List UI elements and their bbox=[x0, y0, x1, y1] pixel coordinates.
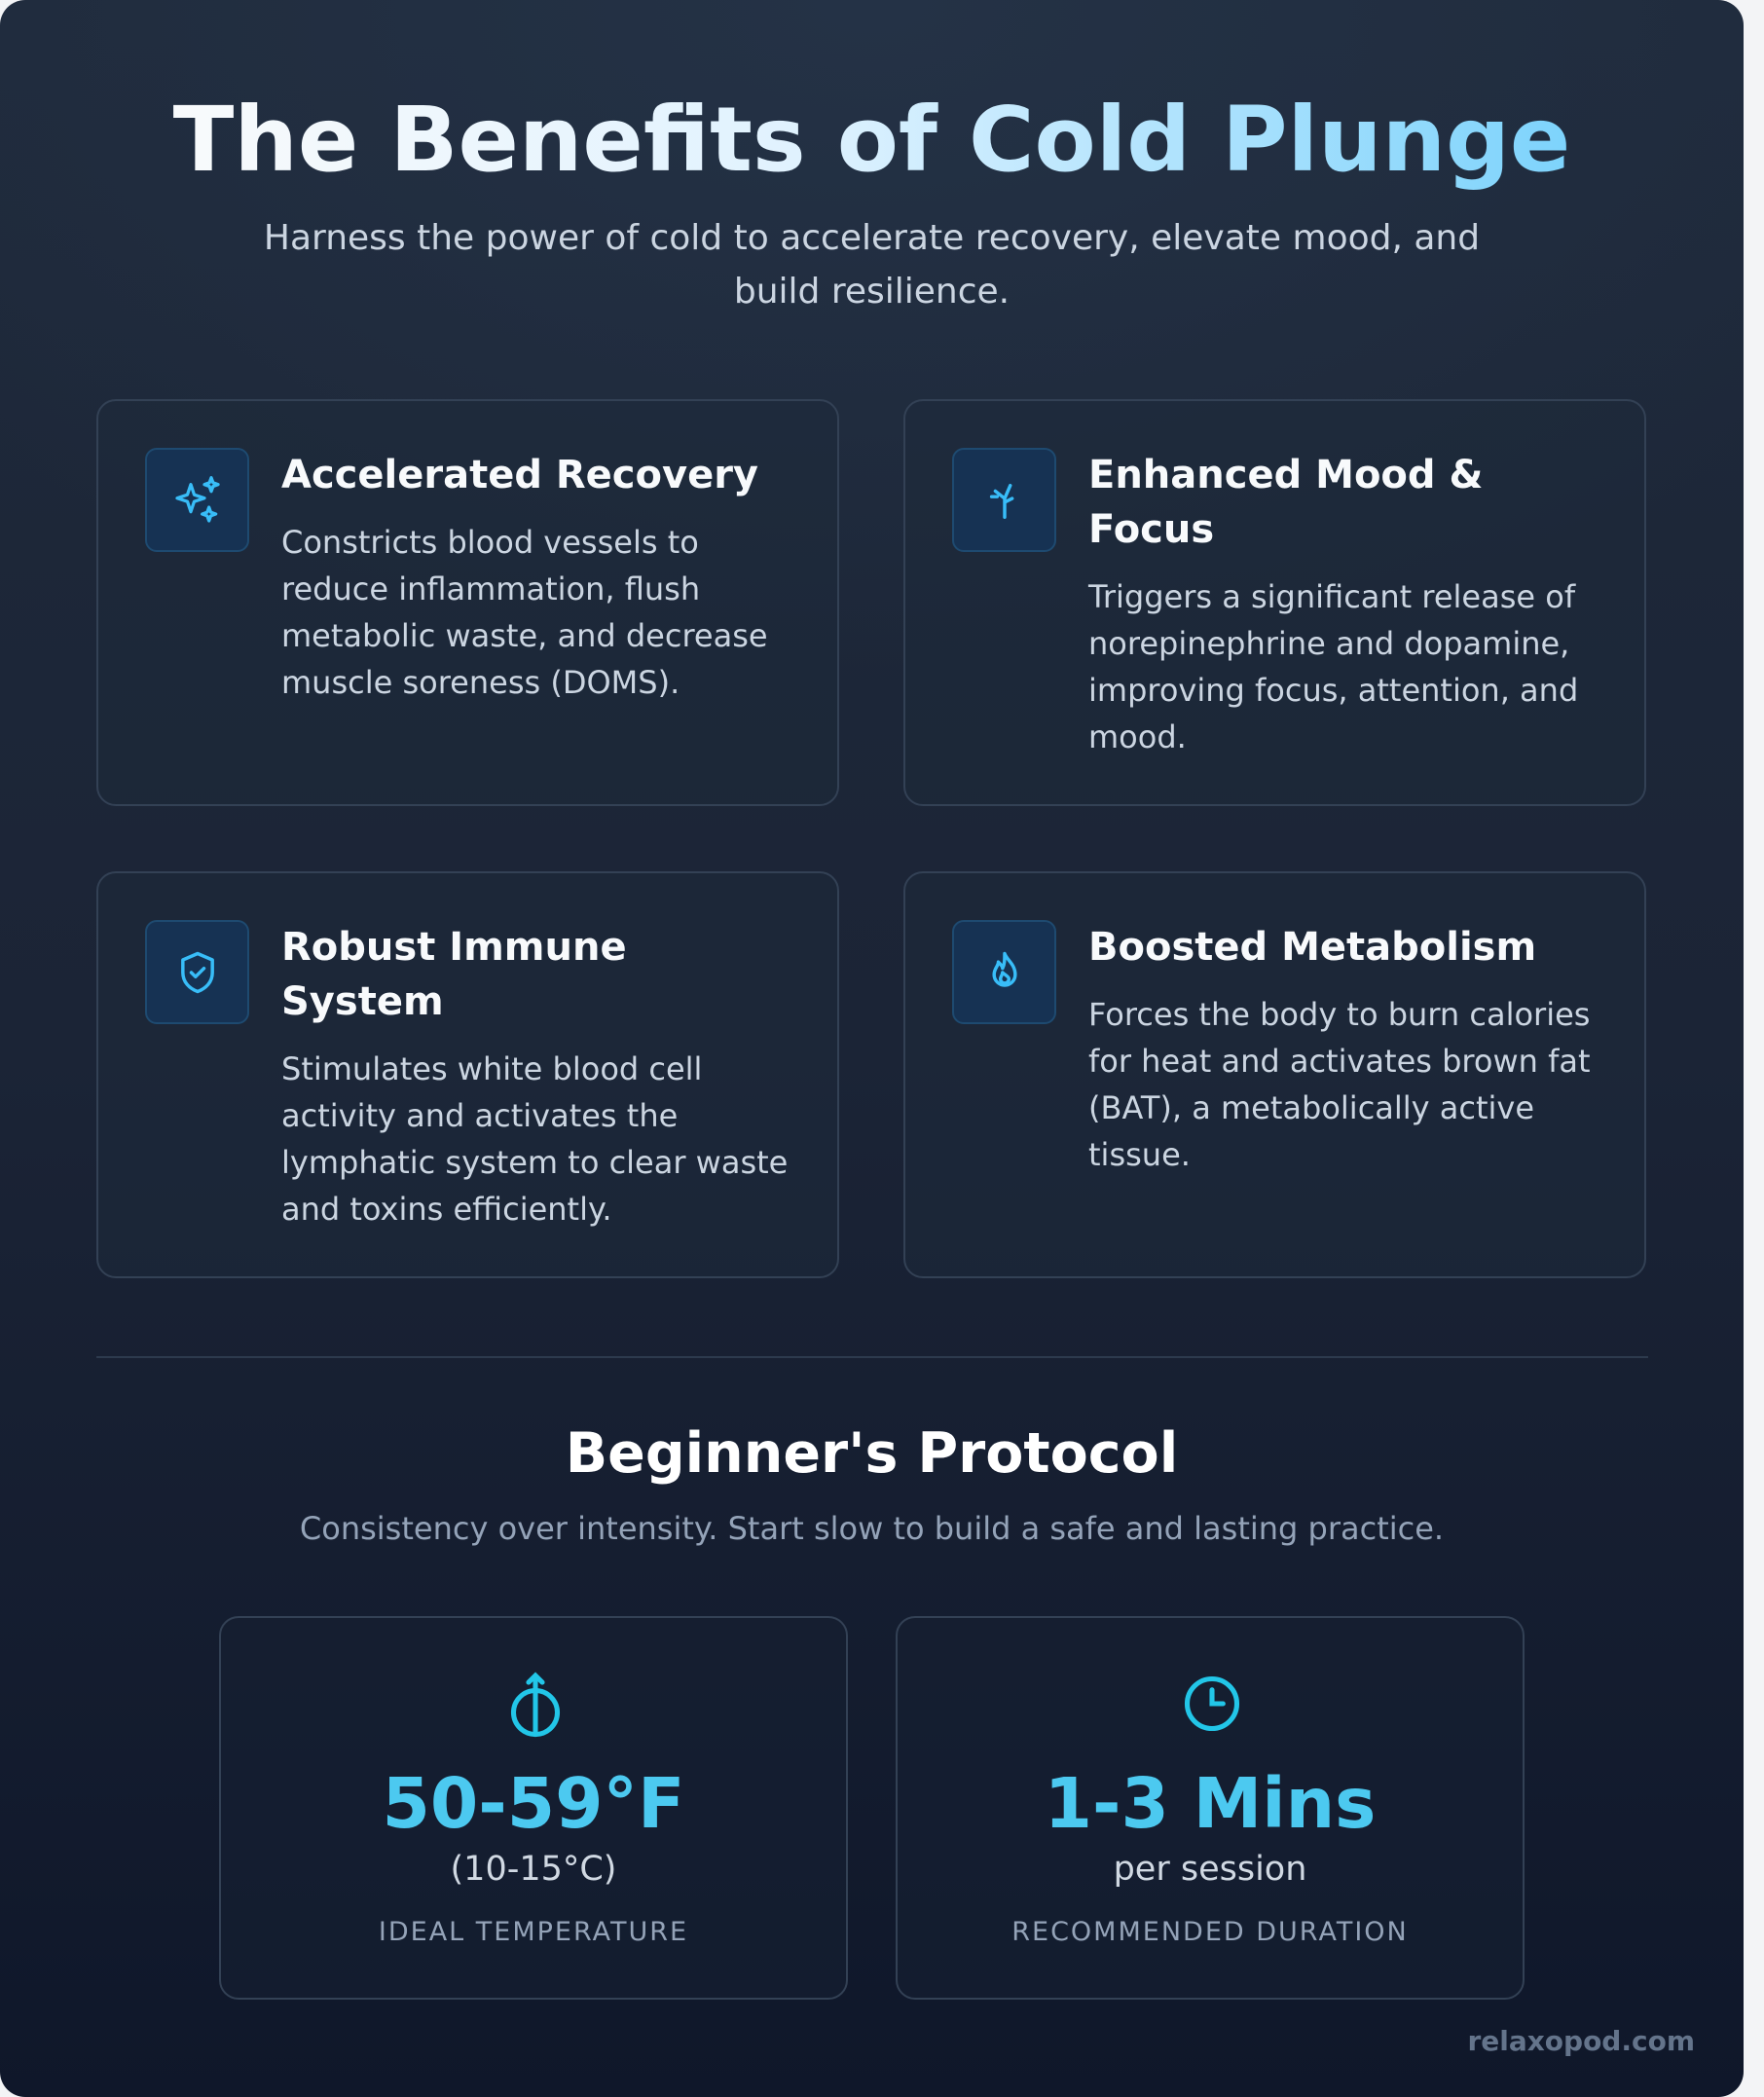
text: Triggers a significant release of norepinephrine and dopamine, improving focus, attention, and mood. bbox=[1088, 578, 1578, 755]
icon: thermometer bbox=[510, 1673, 561, 1737]
text: Forces the body to burn calories for heat and activates brown fat (BAT), a metabolically active tissue. bbox=[1088, 996, 1591, 1173]
subtitle: Harness the power of cold to accelerate recovery, elevate mood, and build resilience. bbox=[264, 218, 1480, 312]
icon: flame bbox=[952, 920, 1056, 1024]
stat: temperature: IDEAL TEMPERATURE bbox=[379, 1917, 688, 1947]
stat: duration: per session bbox=[1114, 1850, 1306, 1889]
value: 1-3 Mins bbox=[1045, 1763, 1376, 1844]
text: Boosted Metabolism bbox=[1088, 925, 1536, 970]
icon: sparkles bbox=[145, 448, 249, 552]
text: Stimulates white blood cell activity and activates the lymphatic system to clear waste and toxins efficiently. bbox=[281, 1050, 788, 1228]
stat: duration: RECOMMENDED DURATION bbox=[1011, 1917, 1409, 1947]
stat: temperature: (10-15°C) bbox=[451, 1850, 616, 1889]
text: Enhanced Mood & Focus bbox=[1088, 453, 1483, 552]
card: metabolism bbox=[903, 871, 1646, 1278]
stat: duration bbox=[896, 1616, 1525, 2000]
protocol subtitle: Consistency over intensity. Start slow to build a safe and lasting practice. bbox=[300, 1510, 1444, 1547]
icon: shield bbox=[145, 920, 249, 1024]
card: accelerated recovery bbox=[96, 399, 839, 806]
title: The Benefits of Cold Plunge bbox=[173, 88, 1570, 192]
heading: protocol: Beginner's Protocol bbox=[566, 1421, 1178, 1486]
text bbox=[281, 925, 788, 1228]
card: immune bbox=[96, 871, 839, 1278]
text: Constricts blood vessels to reduce inflammation, flush metabolic waste, and decrease muscle soreness (DOMS). bbox=[281, 524, 768, 701]
stat: temperature bbox=[219, 1616, 848, 2000]
icon: nerve bbox=[952, 448, 1056, 552]
card: mood bbox=[903, 399, 1646, 806]
text: Accelerated Recovery bbox=[281, 453, 758, 497]
text bbox=[1088, 453, 1578, 755]
text: Robust Immune System bbox=[281, 925, 627, 1024]
icon: clock bbox=[1184, 1676, 1240, 1731]
footer: relaxopod.com bbox=[1467, 2025, 1695, 2057]
value: 50-59°F bbox=[382, 1763, 685, 1844]
